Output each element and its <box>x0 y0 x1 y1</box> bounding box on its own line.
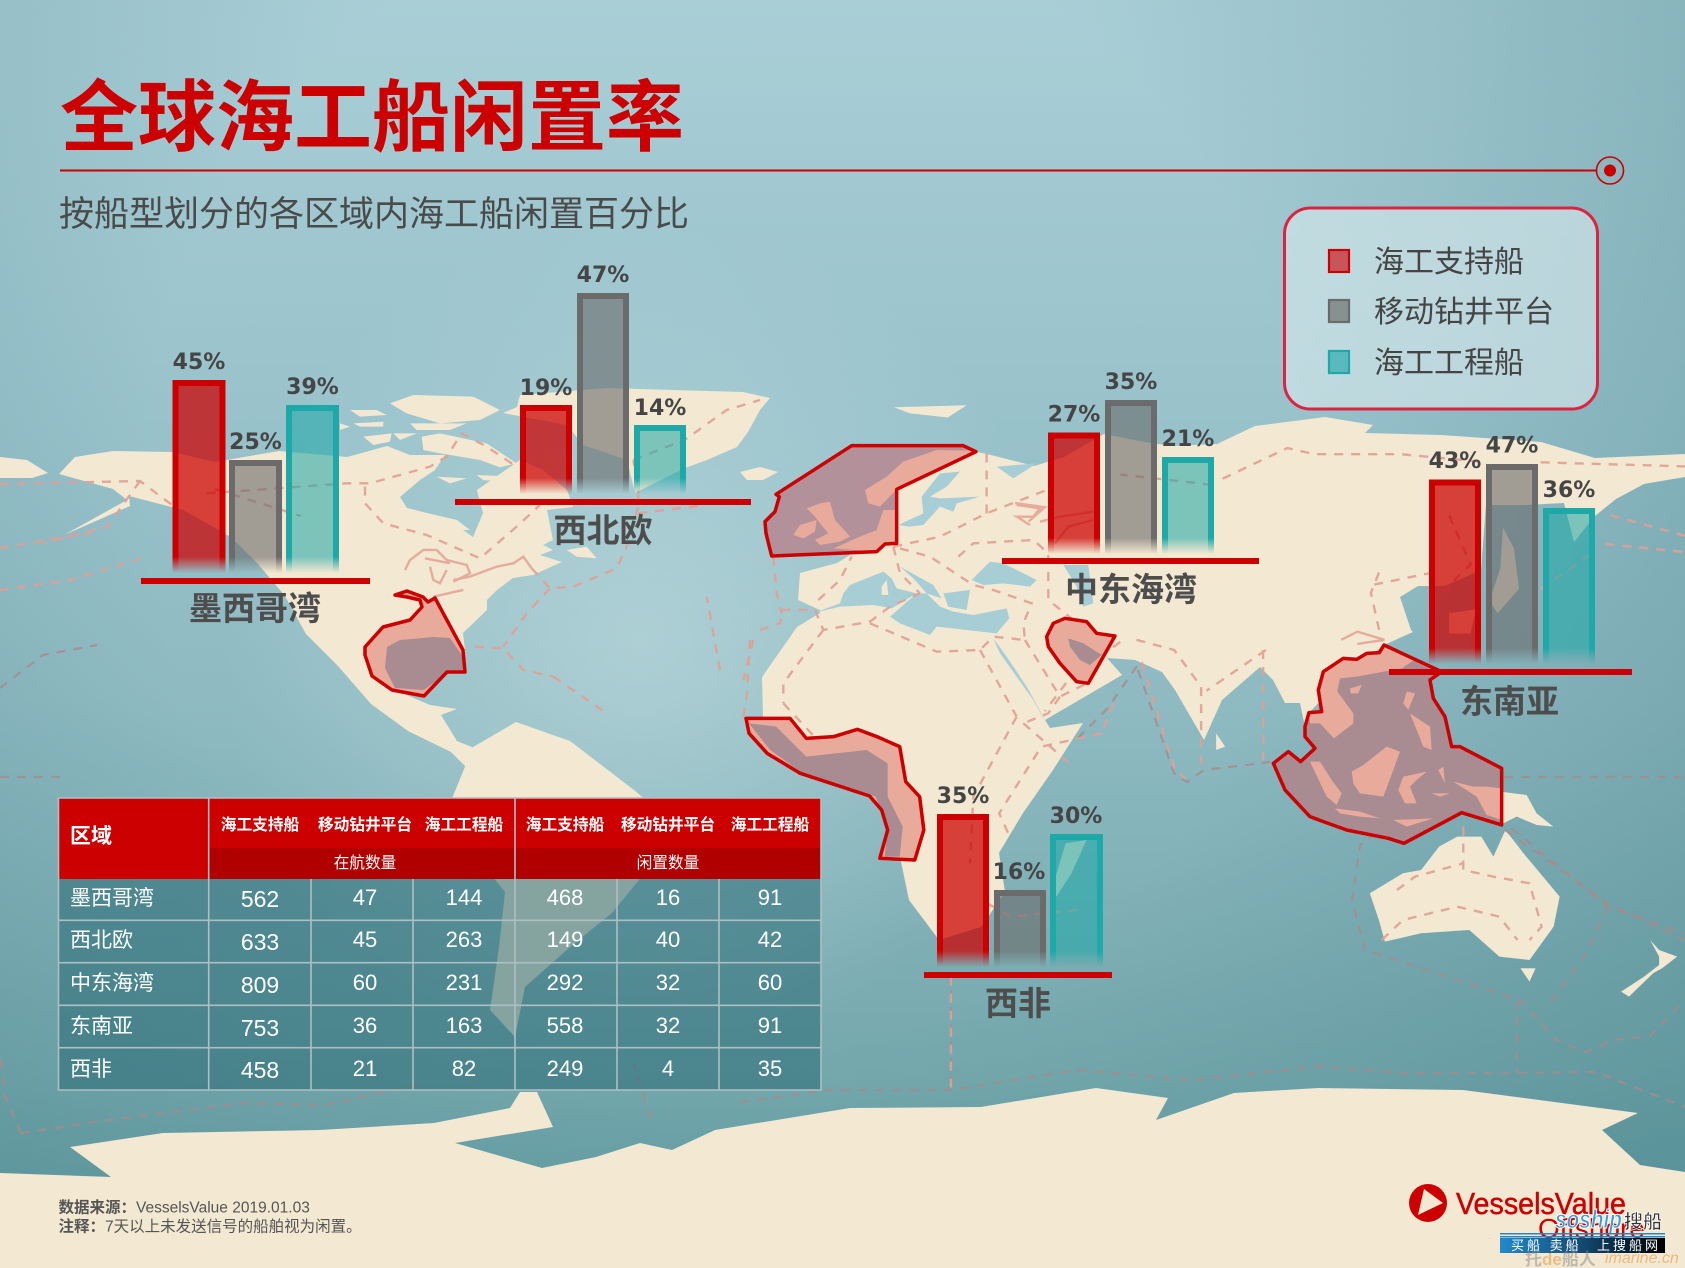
table row: West Africa: 82 <box>452 1056 476 1081</box>
table row: Northwest Europe: 40 <box>656 927 680 952</box>
VesselsValue logo <box>1409 1184 1645 1244</box>
table row: Gulf of Mexico: 144 <box>446 885 482 910</box>
South America <box>451 722 666 1037</box>
map region: Middle East Gulf <box>1047 618 1115 683</box>
bar chart: Northwest Europe <box>455 263 751 549</box>
table row: Middle East Gulf: 32 <box>656 970 680 995</box>
watermark: imarine.cn <box>1605 1250 1679 1267</box>
table row: Southeast Asia: 32 <box>656 1013 680 1038</box>
watermark: 买船 卖船 <box>1511 1238 1582 1253</box>
table row: West Africa: 西非 <box>70 1058 112 1081</box>
bar chart: West Africa: 35% <box>937 784 989 809</box>
table row: Middle East Gulf: 231 <box>446 970 482 995</box>
bar chart: Gulf of Mexico: 45% <box>173 350 225 375</box>
bar chart: Northwest Europe: 14% <box>634 396 686 421</box>
table row: West Africa: 249 <box>547 1056 583 1081</box>
data table <box>58 798 821 1090</box>
legend <box>1284 208 1598 409</box>
routes over Australia and Indian Ocean <box>951 703 1685 1090</box>
table row: Middle East Gulf <box>70 970 782 998</box>
table row: West Africa: 35 <box>758 1056 782 1081</box>
table row: Middle East Gulf: 292 <box>547 970 583 995</box>
bar chart: Northwest Europe: 西北欧 <box>554 512 652 549</box>
Greenland <box>503 388 770 493</box>
bar chart: Northwest Europe: 19% <box>520 376 572 401</box>
table row: Southeast Asia: 91 <box>758 1013 782 1038</box>
New Guinea <box>1500 792 1553 827</box>
Mediterranean, Black Sea, Baltic and other inland seas <box>815 463 1093 721</box>
table row: West Africa <box>70 1056 782 1083</box>
table row: Gulf of Mexico: 91 <box>758 885 782 910</box>
map region: Southeast Asia <box>1273 645 1502 843</box>
title rule with target marker <box>60 157 1624 184</box>
table row: Middle East Gulf: 60 <box>758 970 782 995</box>
bar chart: Middle East Gulf: 中东海湾 <box>1065 571 1197 608</box>
table row: Middle East Gulf: 中东海湾 <box>70 972 154 995</box>
table row: West Africa: 4 <box>662 1056 674 1081</box>
bar chart: Middle East Gulf: 27% <box>1048 402 1100 428</box>
Antarctica <box>0 1088 1685 1268</box>
table row: West Africa: 458 <box>241 1057 279 1083</box>
table row: Gulf of Mexico <box>70 885 782 912</box>
table row: Northwest Europe: 149 <box>547 927 583 952</box>
watermark <box>1500 1204 1679 1268</box>
table header: 区域 <box>70 825 112 848</box>
bar chart: Gulf of Mexico: 25% <box>229 430 282 455</box>
watermark: 上搜船网 <box>1597 1238 1661 1253</box>
routes over North America <box>207 400 760 713</box>
table row: Northwest Europe: 42 <box>758 927 782 952</box>
table row: Southeast Asia: 753 <box>241 1015 279 1041</box>
routes over Europe, Africa and Arabia <box>707 453 1093 863</box>
source note: 注释：7天以上未发送信号的船舶视为闲置。 <box>58 1216 362 1236</box>
table header: 海工工程船 <box>731 815 810 834</box>
bar chart: West Africa: 30% <box>1050 804 1102 829</box>
source note: 数据来源：VesselsValue 2019.01.03 <box>58 1198 310 1216</box>
Arctic islands <box>340 395 597 558</box>
Chukotka and Iceland <box>0 457 778 480</box>
table row: Southeast Asia: 558 <box>547 1013 583 1038</box>
legend item: offshore engineering vessels: 海工工程船 <box>1374 347 1524 380</box>
table row: Middle East Gulf: 809 <box>241 972 279 998</box>
bar chart: Southeast Asia: 东南亚 <box>1460 683 1559 720</box>
bar chart: Middle East Gulf: 21% <box>1162 427 1214 452</box>
table row: Gulf of Mexico: 16 <box>656 885 680 910</box>
legend item: offshore support vessels: 海工支持船 <box>1374 246 1524 279</box>
world map landmasses <box>0 388 1685 1268</box>
shipping routes and maritime boundaries <box>0 400 1685 1133</box>
bar chart: Gulf of Mexico <box>141 350 370 627</box>
bar chart: Middle East Gulf <box>1002 370 1259 608</box>
table row: Southeast Asia: 163 <box>446 1013 482 1038</box>
table row: Northwest Europe: 西北欧 <box>70 929 133 952</box>
VesselsValue logo: VesselsValue <box>1456 1186 1626 1221</box>
VesselsValue logo: Offshore <box>1538 1213 1645 1244</box>
bar chart: Gulf of Mexico: 墨西哥湾 <box>189 590 321 627</box>
table header: 海工支持船 <box>526 815 605 834</box>
routes over Asia <box>1015 448 1685 779</box>
subtitle: 按船型划分的各区域内海工船闲置百分比 <box>59 195 689 234</box>
table row: Northwest Europe: 263 <box>446 927 482 952</box>
map region: Northwest Europe <box>765 446 976 556</box>
table row: Middle East Gulf: 60 <box>353 970 377 995</box>
bar chart: Southeast Asia: 36% <box>1543 478 1595 503</box>
bar chart: West Africa: 西非 <box>985 985 1051 1022</box>
table row: Northwest Europe: 633 <box>241 929 279 955</box>
table header: 移动钻井平台 <box>318 815 412 834</box>
table row: Southeast Asia: 36 <box>353 1013 377 1038</box>
table row: Northwest Europe <box>70 927 782 955</box>
table header: 移动钻井平台 <box>621 815 715 834</box>
bar chart: Middle East Gulf: 35% <box>1105 370 1157 395</box>
bar chart: Gulf of Mexico: 39% <box>286 375 339 400</box>
table row: Northwest Europe: 45 <box>353 927 377 952</box>
Australia, New Zealand, Madagascar, Sri Lanka <box>1050 733 1677 997</box>
North America <box>59 446 573 774</box>
table row: Gulf of Mexico: 468 <box>547 885 583 910</box>
legend item: mobile drilling rigs: 移动钻井平台 <box>1374 296 1554 329</box>
source note <box>58 1198 362 1236</box>
title: 全球海工船闲置率 <box>60 74 684 162</box>
bar chart: Northwest Europe: 47% <box>577 263 629 288</box>
table header: 闲置数量 <box>637 854 699 872</box>
Kamchatka and Japan <box>894 405 1519 634</box>
table header: 海工支持船 <box>221 815 300 834</box>
watermark: 搜船 <box>1624 1211 1662 1233</box>
watermark: soship <box>1555 1204 1622 1234</box>
table row: Gulf of Mexico: 墨西哥湾 <box>70 887 154 910</box>
map region: Gulf of Mexico <box>365 591 465 696</box>
bar chart: West Africa: 16% <box>993 860 1045 885</box>
table row: Gulf of Mexico: 562 <box>241 886 279 912</box>
Eurasia and Africa <box>762 417 1685 940</box>
bar chart: Southeast Asia: 43% <box>1429 449 1481 474</box>
table row: Gulf of Mexico: 47 <box>353 885 377 910</box>
table header: 在航数量 <box>334 854 396 872</box>
map region: West Africa <box>746 718 924 860</box>
table row: West Africa: 21 <box>353 1056 377 1081</box>
bar chart: Southeast Asia: 47% <box>1486 434 1538 458</box>
bar chart: West Africa <box>924 784 1112 1022</box>
bar chart: Southeast Asia <box>1389 434 1632 720</box>
table row: Southeast Asia <box>70 1013 782 1041</box>
table header: 海工工程船 <box>425 815 504 834</box>
table header <box>58 798 821 879</box>
table row: Southeast Asia: 东南亚 <box>70 1015 133 1038</box>
